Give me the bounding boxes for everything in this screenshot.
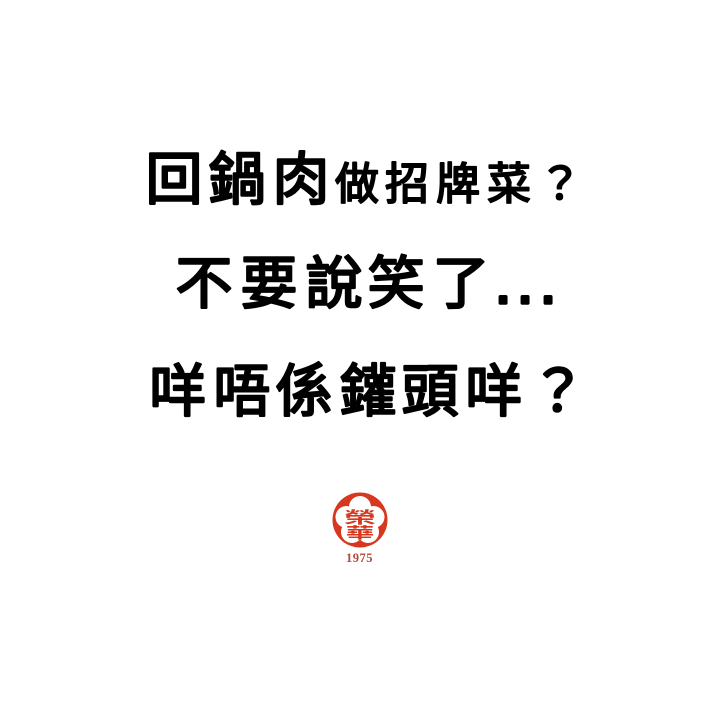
heading line 3: ？ bbox=[530, 360, 586, 424]
heading line 1: 回 bbox=[146, 148, 202, 212]
heading line 1: 菜 bbox=[487, 160, 531, 209]
logo: plum blossom emblem: 榮 bbox=[344, 509, 376, 527]
heading line 1: 牌 bbox=[436, 160, 480, 209]
heading line 1: 做 bbox=[335, 160, 379, 209]
heading line 3: 唔 bbox=[214, 360, 270, 424]
heading line 1 bbox=[146, 148, 582, 212]
heading line 2: 了 bbox=[432, 252, 490, 316]
heading line 3: 係 bbox=[276, 360, 332, 424]
heading line 1: ？ bbox=[538, 160, 582, 209]
heading line 3: 咩 bbox=[466, 360, 522, 424]
heading line 1: 招 bbox=[385, 160, 429, 209]
heading line 2: ... bbox=[495, 251, 556, 316]
heading line 1: 鍋 bbox=[208, 148, 266, 212]
heading line 2: 要 bbox=[240, 252, 298, 316]
heading line 2: 笑 bbox=[368, 252, 424, 316]
heading line 1: 肉 bbox=[272, 148, 330, 212]
heading line 3: 頭 bbox=[402, 360, 458, 424]
heading line 3 bbox=[150, 360, 586, 424]
logo year: 1975 bbox=[346, 551, 373, 565]
heading line 3: 鑵 bbox=[340, 360, 396, 424]
heading line 2: 不 bbox=[176, 252, 232, 316]
heading line 2 bbox=[176, 251, 556, 316]
logo: plum blossom emblem bbox=[332, 492, 388, 548]
heading line 2: 說 bbox=[306, 252, 362, 316]
logo: plum blossom emblem: 華 bbox=[346, 524, 374, 541]
heading line 3: 咩 bbox=[150, 360, 206, 424]
